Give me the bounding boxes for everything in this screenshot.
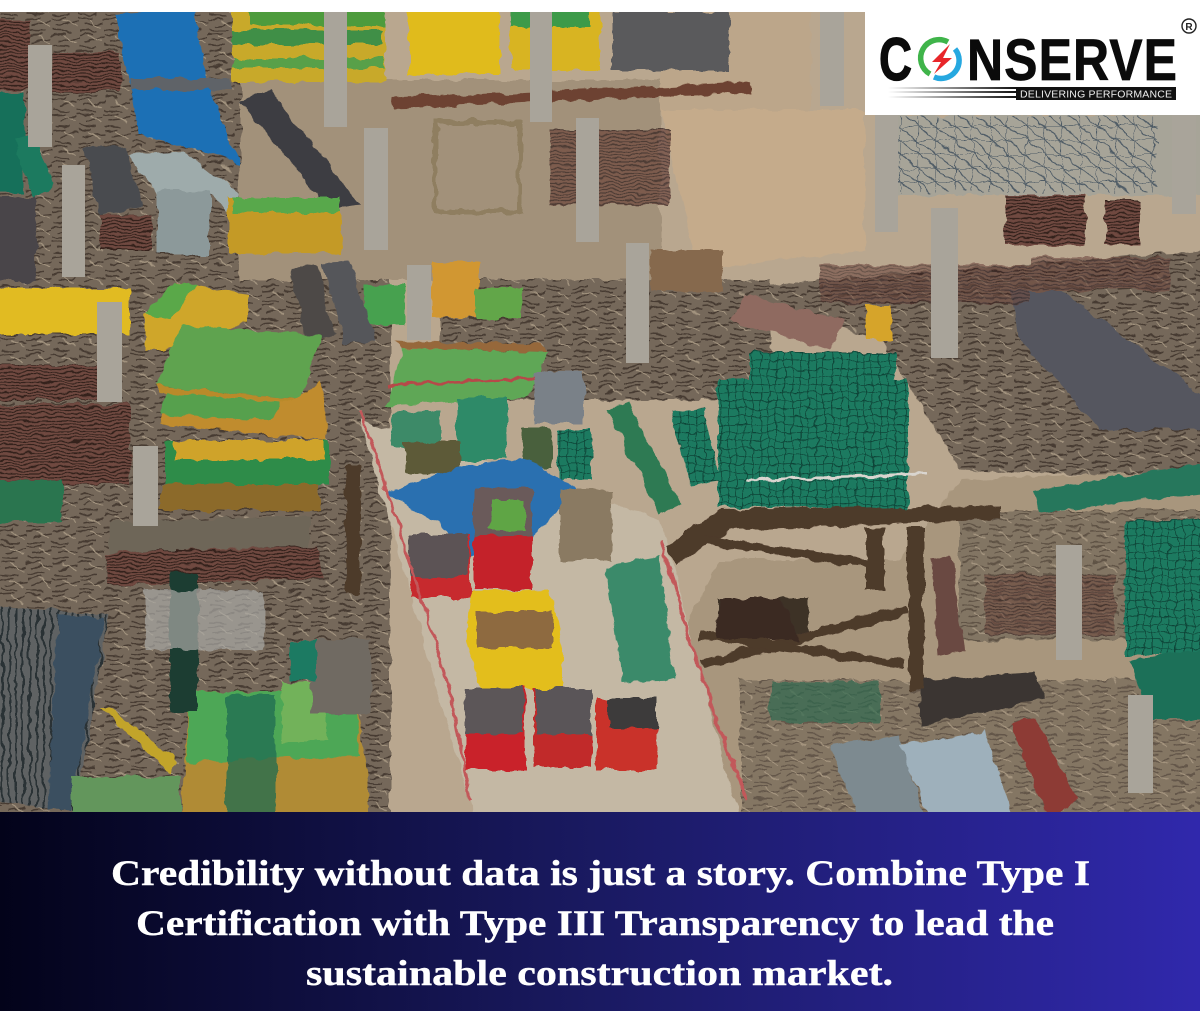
left stacks and racks bbox=[0, 20, 360, 282]
green panel center bbox=[385, 348, 548, 406]
caption text bbox=[111, 853, 1090, 993]
brown planks stacks left bbox=[0, 365, 320, 586]
teal formwork racks bbox=[392, 352, 908, 515]
registered mark bbox=[1182, 19, 1196, 33]
logo wordmark bbox=[879, 26, 1177, 93]
concrete columns bbox=[28, 12, 1196, 793]
teal stack center bottom bbox=[605, 556, 674, 682]
caption band bbox=[0, 812, 1200, 1011]
green yellow stacks top bbox=[231, 12, 731, 84]
timber beam bbox=[390, 82, 752, 108]
caption text: sustainable construction market. bbox=[306, 953, 893, 993]
caption text: Credibility without data is just a story. Combine Type I bbox=[111, 853, 1090, 893]
yellow box bbox=[466, 590, 562, 690]
scaffold railing bbox=[360, 378, 925, 800]
right materials bbox=[435, 122, 1200, 820]
red boxes center bbox=[410, 488, 612, 598]
registered mark: R bbox=[1185, 22, 1193, 33]
green yellow stack bottom left bbox=[145, 572, 370, 822]
logo wordmark: NSERVE bbox=[967, 29, 1177, 93]
red boxes bottom bbox=[465, 688, 656, 770]
logo tagline bbox=[888, 87, 1176, 100]
logo panel bbox=[865, 12, 1200, 115]
logo icon: green and blue arrows with red bolt bbox=[921, 40, 959, 78]
green yellow stack bbox=[0, 198, 522, 350]
blue tarp center bbox=[386, 460, 578, 555]
rebar bottom left bbox=[0, 604, 180, 822]
bridge structure bbox=[346, 465, 1000, 690]
caption text: Certification with Type III Transparency to lead the bbox=[136, 903, 1054, 943]
logo wordmark: C bbox=[879, 26, 912, 93]
blue tarp top left bbox=[115, 8, 240, 165]
large green formwork stack bbox=[157, 325, 330, 510]
logo tagline: DELIVERING PERFORMANCE bbox=[1020, 88, 1172, 100]
